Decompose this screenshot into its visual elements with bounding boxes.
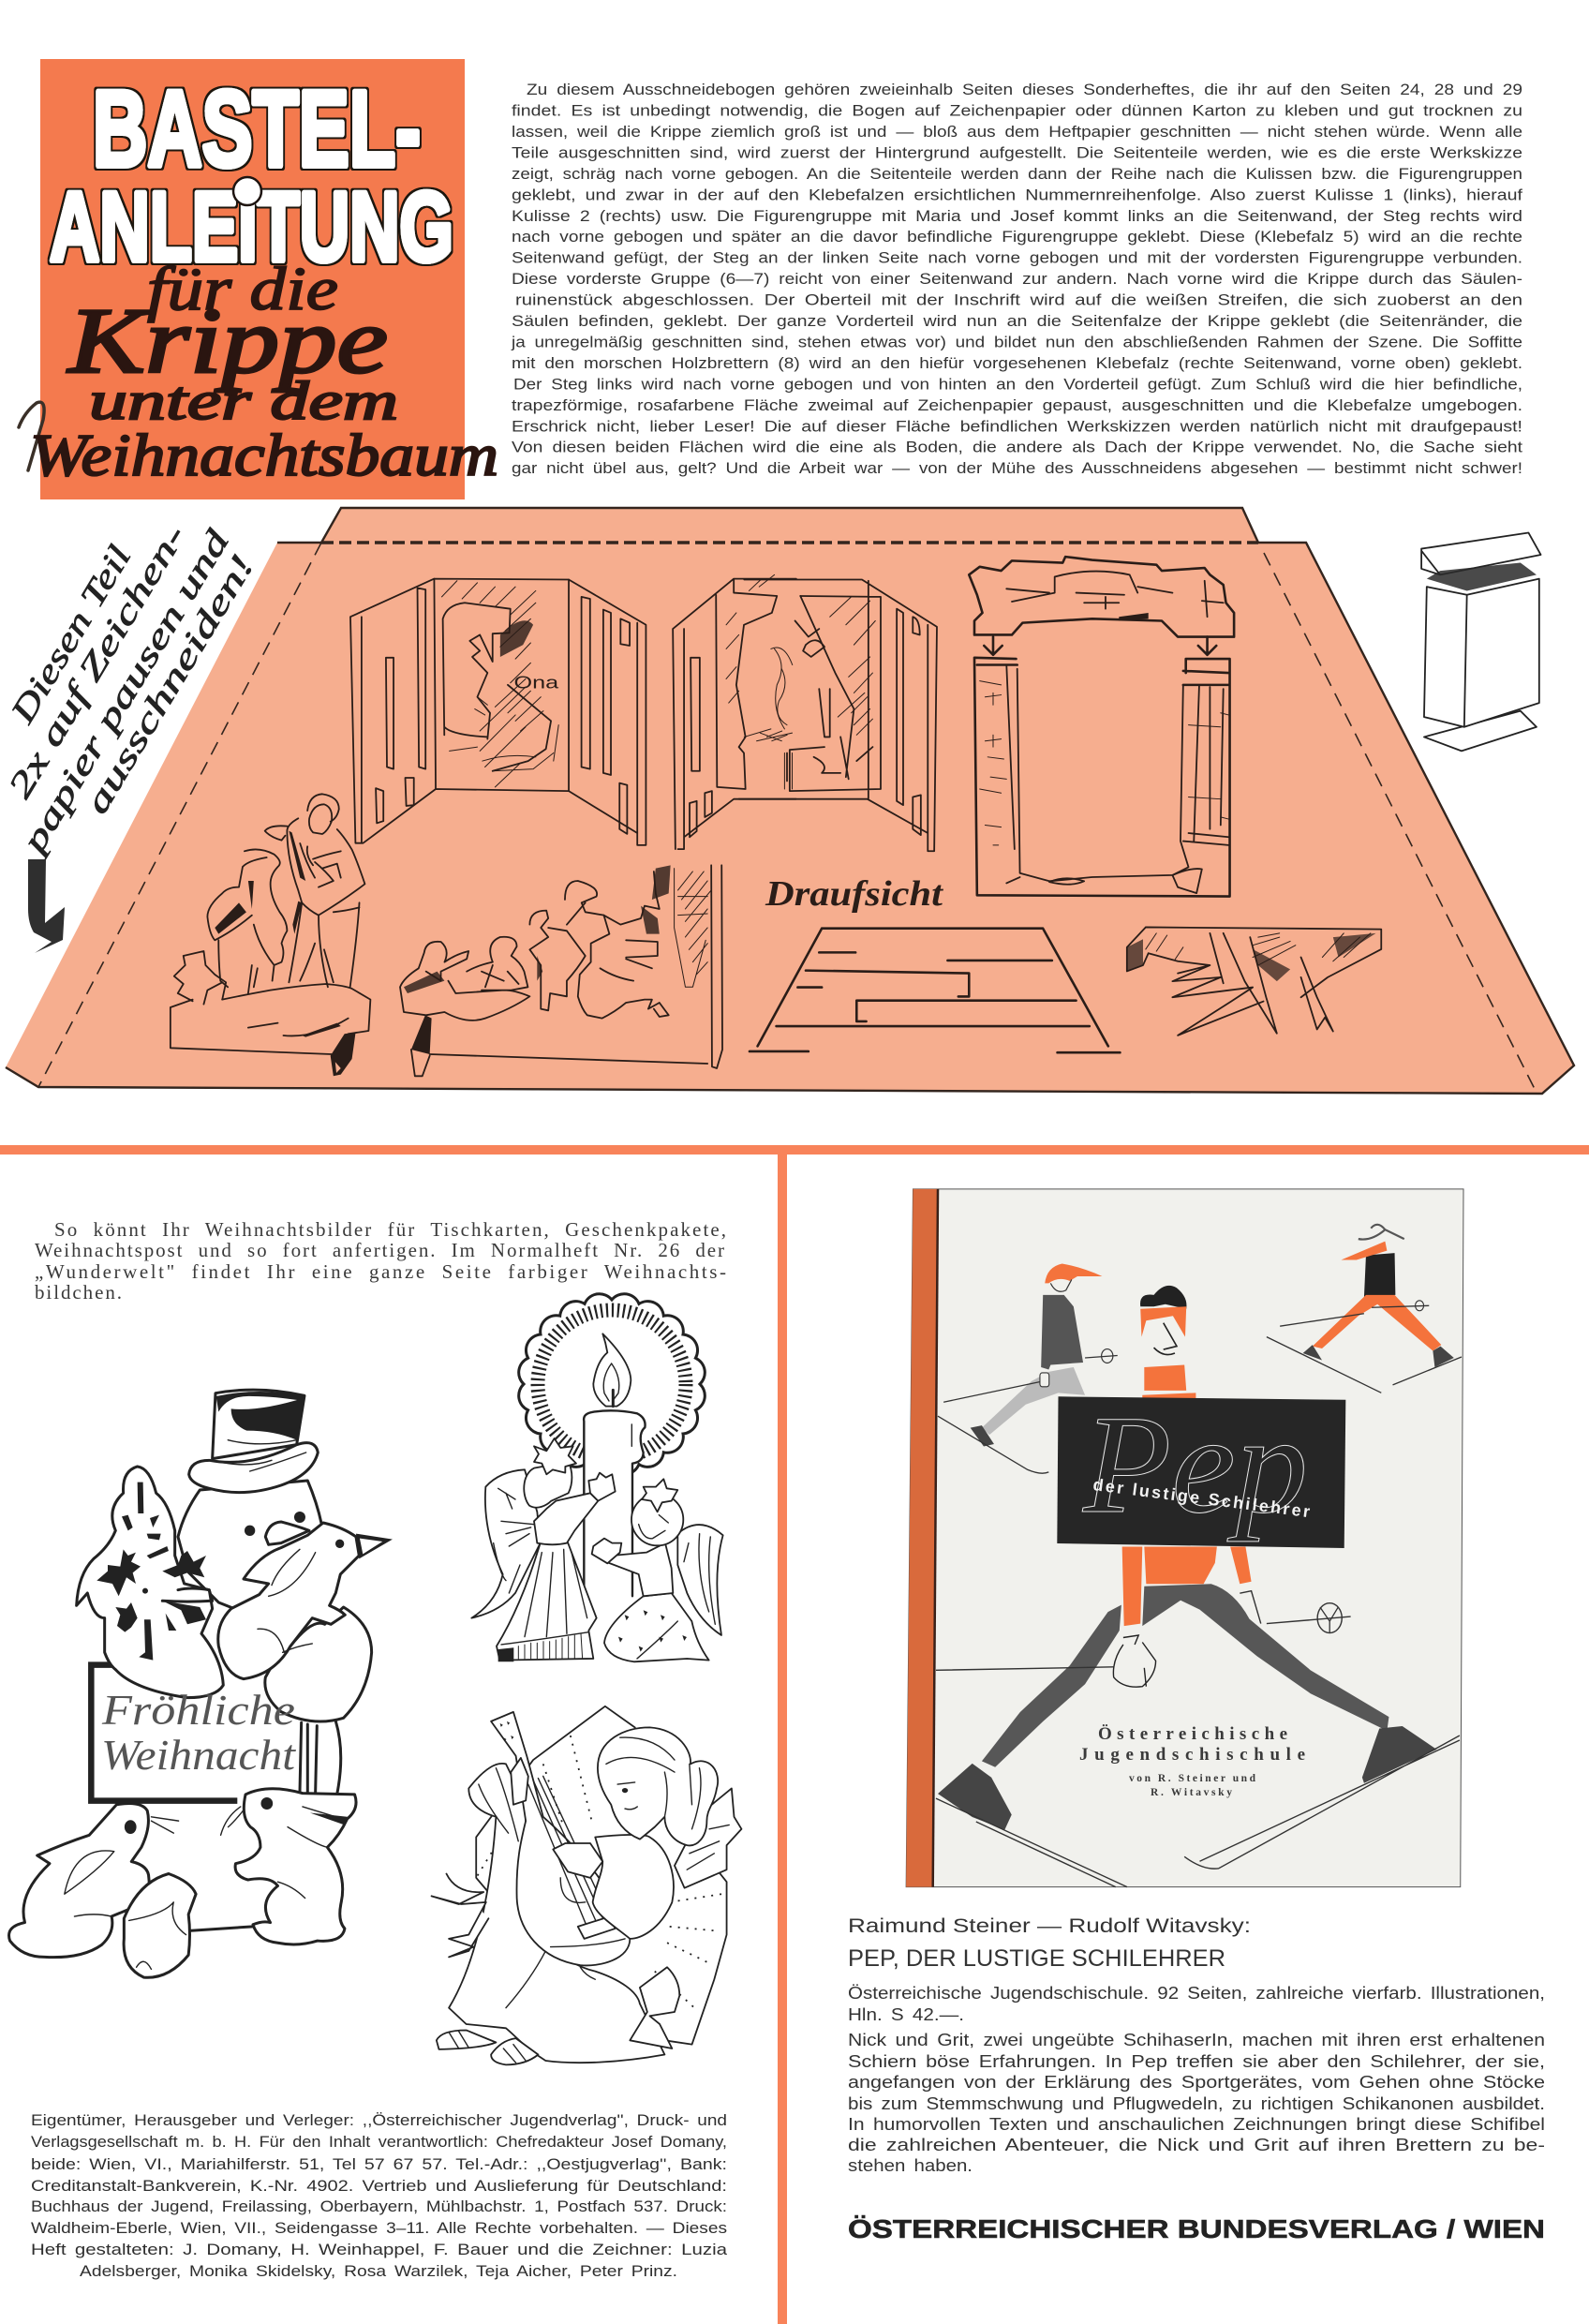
text block: instructions: trapezförmige, rosafarbene Fläche zweimal auf Zeichenpapier gepaust, ausgeschnitten und die Klebefalze umgebogen. bbox=[512, 397, 1522, 414]
left angel robe bbox=[497, 1540, 597, 1661]
right angel torso and arm bbox=[606, 1543, 673, 1596]
heading: Weihnachtsbaum: Weihnachtsbaum bbox=[30, 422, 498, 488]
text block: instructions: Kulisse 2 (rechts) usw. Die Figurengruppe mit Maria und Josef kommt links an die Seitenwand, der Steg rechts wird bbox=[512, 208, 1522, 225]
text block: book description: In humorvollen Texten und anschaulichen Zeichnungen bringt diese Schifibel bbox=[848, 2115, 1545, 2134]
text block: imprint: Buchhaus der Jugend, Freilassing, Oberbayern, Mühlbachstr. 1, Postfach 537. Druck: bbox=[31, 2198, 727, 2215]
kneeling figure bbox=[207, 849, 287, 993]
text block: instructions: Säulen befinden, geklebt. Der ganze Vorderteil wird nun an die Seitenfalze der Krippe geklebt (die Seitenränder, die bbox=[512, 313, 1522, 330]
heading: für die: für die bbox=[147, 255, 338, 323]
illustration: shepherds figure group bbox=[400, 865, 722, 1076]
illustration: left set piece (Kulisse 1) bbox=[350, 579, 646, 845]
illustration: snowman with rabbits and sign bbox=[9, 1390, 393, 1977]
right angel head and star bbox=[631, 1494, 683, 1545]
column frame bbox=[974, 658, 1230, 897]
divider: orange rule bbox=[0, 1145, 1589, 2324]
Pep teacher head bbox=[1140, 1286, 1186, 1309]
left skier bbox=[1045, 1264, 1102, 1283]
text block: instructions: Seitenwand gefügt, der Steg an der linken Seite nach vorne gebogen und mit der vordersten Figurengruppe verbunden. bbox=[512, 250, 1522, 267]
text block: instructions: ja unregelmäßig geschnitten sind, stehen etwas vor) und bildet nun den abschließenden Rahmen der Szene. Die Soffitte bbox=[511, 334, 1522, 350]
illustration: soffit with wooden boards bbox=[1127, 927, 1381, 1035]
nose and rabbit head bbox=[265, 1522, 309, 1544]
text block: instructions: Teile ausgeschnitten sind, wird zuerst der Hintergrund aufgestellt. Die Seitenteile werden, wie es die erste Werkskizze bbox=[512, 144, 1522, 161]
publisher line: ÖSTERREICHISCHER BUNDESVERLAG / WIEN bbox=[848, 2214, 1545, 2243]
icon: assembled white box bbox=[1421, 532, 1541, 751]
text block: imprint: beide: Wien, VI., Mariahilferstr. 51, Tel 57 67 57. Tel.-Adr.: ,,Oestjugverlag'', Bank: bbox=[31, 2156, 727, 2173]
illustration: right set piece (Kulisse 2) bbox=[673, 574, 937, 851]
greeting text: Fröhliche Weihnacht bbox=[101, 1686, 296, 1779]
cover imprint bbox=[1079, 1724, 1305, 1798]
label: Draufsicht: Draufsicht bbox=[765, 874, 944, 914]
text block: book description: die zahlreichen Abenteuer, die Nick und Grit auf ihren Brettern zu be- bbox=[848, 2136, 1545, 2154]
text block: instructions: zeigt, schräg nach vorne gebogen. An die Seitenteile werden dann der Reihe nach die Kulissen bzw. die Figurengruppen bbox=[512, 166, 1522, 183]
text: rotated handwritten note: ausschneiden! bbox=[78, 548, 261, 820]
fan background bbox=[476, 1706, 727, 2045]
right angel wing bbox=[677, 1525, 723, 1635]
illustration: portal with columns bbox=[969, 557, 1234, 897]
bush and base bbox=[174, 951, 226, 1005]
small inscription on the set piece: Ona bbox=[514, 673, 558, 693]
title plate lettering: der lustige Schilehrer bbox=[1092, 1475, 1311, 1521]
panel: peach trapezoid cut-out sheet bbox=[6, 508, 1574, 1094]
heading: ANLEITUNG: ANLEITUNG bbox=[50, 172, 453, 282]
text block: instructions: Erschrick nicht, lieber Leser! Die auf dieser Fläche befindlichen Werkskizzen werden natürlich nicht mit draufgepaust! bbox=[512, 418, 1522, 435]
Pep legs bbox=[1142, 1584, 1389, 1731]
text block: book authors and title: Raimund Steiner — Rudolf Witavsky: bbox=[848, 1915, 1251, 1937]
rabbit right bbox=[235, 1789, 356, 1944]
text block: instructions: lassen, weil die Krippe ziemlich groß ist und — bloß aus dem Heftpapier geschnitten — nicht stehen würde. Wenn alle bbox=[512, 124, 1522, 141]
text block: instructions: Diese vorderste Gruppe (6—7) reicht von einer Seitenwand zur andern. Nach vorne wird die Krippe durch das Säulen- bbox=[512, 271, 1522, 288]
text block: Weihnachtsbilder note: So könnt Ihr Weihnachtsbilder für Tischkarten, Geschenkpakete, bbox=[54, 1218, 726, 1241]
text: rotated handwritten note: 2x auf Zeichen- bbox=[1, 518, 193, 804]
illustration: angels with candle bbox=[471, 1294, 723, 1661]
text block: book description: Hln. S 42.—. bbox=[848, 2005, 964, 2024]
heading: Weihnachtsbaum bbox=[19, 402, 498, 488]
spine bbox=[906, 1189, 938, 1887]
snowman head bbox=[178, 1481, 321, 1628]
heading: Krippe: Krippe bbox=[67, 289, 388, 393]
left angel torso and arm bbox=[534, 1493, 598, 1544]
text block: book authors and title: PEP, DER LUSTIGE SCHILEHRER bbox=[848, 1945, 1225, 1972]
cover imprint: von R. Steiner und bbox=[1129, 1773, 1256, 1784]
top hat bbox=[213, 1390, 304, 1459]
title plate bbox=[1057, 1396, 1345, 1548]
sign bbox=[91, 1665, 237, 1801]
text block: imprint bbox=[31, 2112, 728, 2280]
panel: book cover bbox=[906, 1189, 1463, 1887]
text block: Weihnachtsbilder note bbox=[35, 1218, 726, 1304]
lute bbox=[491, 1712, 630, 1965]
text block: book description: Österreichische Jugendschischule. 92 Seiten, zahlreiche vierfarb. Illustrationen, bbox=[848, 1984, 1545, 2003]
left angel head and star bbox=[524, 1462, 572, 1508]
text block: imprint: Waldheim-Eberle, Wien, VII., Seidengasse 3–11. Alle Rechte vorbehalten. — Dieses bbox=[31, 2220, 727, 2237]
text block: book description: stehen haben. bbox=[848, 2156, 973, 2175]
text block: imprint: Heft gestalteten: J. Domany, H. Weinhappel, F. Bauer und die Zeichner: Luzia bbox=[31, 2242, 728, 2258]
text block: imprint: Creditanstalt-Bankverein, K.-Nr. 4902. Vertrieb und Auslieferung für Deutschland: bbox=[31, 2178, 727, 2195]
text block: instructions: Von diesen beiden Flächen wird die eine als Boden, die andere als Dach der Krippe verwendet. No, die Sache sieht bbox=[512, 439, 1522, 456]
sleeve and hands bbox=[593, 1835, 674, 1939]
cover imprint: Jugendschischule bbox=[1079, 1745, 1305, 1765]
candle halo bbox=[519, 1294, 705, 1474]
text: rotated handwritten note: papier pausen und bbox=[12, 522, 237, 862]
portal top piece bbox=[969, 557, 1234, 637]
right skier bbox=[1364, 1253, 1395, 1297]
illustration: Mary and Joseph figure group bbox=[171, 794, 370, 1076]
boots and skis bbox=[938, 1764, 1012, 1829]
text block: Weihnachtsbilder note: „Wunderwelt" findet Ihr eine ganze Seite farbiger Weihnachts- bbox=[35, 1260, 726, 1283]
cover imprint: Österreichische bbox=[1098, 1724, 1287, 1744]
heading: unter dem: unter dem bbox=[89, 370, 398, 431]
icon: curved down arrow bbox=[28, 859, 65, 953]
right angel dress bbox=[604, 1593, 709, 1661]
text block: instructions: Zu diesem Ausschneidebogen gehören zweieinhalb Seiten dieses Sonderheftes, die ihr auf den Seiten 24, 28 und 29 bbox=[527, 82, 1522, 98]
shoes bbox=[437, 2030, 538, 2064]
upper rabbit body bbox=[218, 1523, 359, 1679]
ribbons and robe bbox=[449, 1764, 664, 2063]
text block: Weihnachtsbilder note: Weihnachtspost und so fort anfertigen. Im Normalheft Nr. 26 der bbox=[35, 1239, 724, 1261]
heading: BASTEL-: BASTEL- bbox=[93, 69, 421, 189]
wing bbox=[675, 1788, 741, 1888]
assembly arrows bbox=[984, 637, 1216, 655]
Pep body and arms bbox=[1144, 1546, 1217, 1584]
text block: instructions: ruinenstück abgeschlossen. Der Oberteil mit der Inschrift wird auf die weißen Streifen, die sich zuoberst an den bbox=[515, 292, 1522, 309]
text block: instructions: findet. Es ist unbedingt notwendig, die Bogen auf Zeichenpapier oder dünnen Karton zu kleben und gut trocknen zu bbox=[512, 103, 1522, 120]
text block: instructions bbox=[511, 82, 1522, 477]
text block: imprint: Adelsberger, Monika Skidelsky, Rosa Warzilek, Teja Aicher, Peter Prinz. bbox=[80, 2263, 677, 2280]
flame bbox=[593, 1333, 631, 1407]
text: rotated handwritten note bbox=[1, 518, 261, 862]
left angel wing bbox=[471, 1469, 541, 1618]
rabbit left bbox=[9, 1804, 149, 1958]
text block: instructions: mit den morschen Holzbrettern (8) wird an den hiefür vorgesehenen Klebefalz (rechte Seitenwand, vorne oben) geklebt. bbox=[512, 355, 1522, 372]
candle body bbox=[584, 1410, 646, 1596]
text block: instructions: nach vorne gebogen und später an die davor befindliche Figurengruppe geklebt. Diese (Klebefalz 5) wird an die rechte bbox=[512, 229, 1522, 246]
panel: title block bbox=[19, 59, 498, 499]
text block: book description: Schiern böse Erfahrungen. In Pep treffen sie aber den Schilehrer, der sie, bbox=[848, 2052, 1545, 2071]
title plate lettering: Pep bbox=[1082, 1387, 1308, 1542]
rabbit small bbox=[124, 1874, 196, 1977]
greeting text: Fröhliche Weihnacht: Fröhliche bbox=[101, 1686, 295, 1734]
text block: book authors and title bbox=[848, 1915, 1251, 1972]
text block: imprint: Eigentümer, Herausgeber und Verleger: ,,Österreichischer Jugendverlag'', Druck- und bbox=[31, 2112, 727, 2129]
greeting text: Fröhliche Weihnacht: Weihnacht bbox=[101, 1731, 296, 1779]
text block: instructions: Der Steg links wird nach vorne gebogen und von hinten an den Vorderteil gefügt. Zum Schluß wird die hier befindliche, bbox=[513, 376, 1522, 393]
text block: instructions: gar nicht übel aus, gelt? Und die Arbeit war — von der Mühe des Ausschneidens abgesehen — bestimmt nicht schwer! bbox=[512, 460, 1522, 477]
text: rotated handwritten note: Diesen Teil bbox=[3, 539, 139, 730]
text block: Weihnachtsbilder note: bildchen. bbox=[35, 1281, 122, 1304]
text block: book description bbox=[848, 1984, 1545, 2175]
illustration: angel playing lute bbox=[432, 1706, 741, 2064]
text block: book description: Nick und Grit, zwei ungeübte SchihaserIn, machen mit ihren erst erhaltenen bbox=[848, 2031, 1545, 2049]
cover imprint: R. Witavsky bbox=[1151, 1787, 1232, 1798]
diagram: floor plan bbox=[750, 929, 1120, 1052]
tree bbox=[77, 1467, 223, 1698]
lower body and legs bbox=[265, 1607, 372, 1721]
text block: book description: bis zum Stemmschwung und Pflugwedeln, zu richtigen Schikanonen ausbildet. bbox=[848, 2094, 1545, 2113]
hands and poles bbox=[1113, 1635, 1156, 1687]
head and hair bbox=[598, 1727, 718, 1845]
text block: imprint: Verlagsgesellschaft m. b. H. Für den Inhalt verantwortlich: Chefredakteur Josef Domany, bbox=[31, 2134, 727, 2151]
text block: book description: angefangen von der Erklärung des Sportgerätes, vom Gehen ohne Stöcke bbox=[848, 2073, 1545, 2092]
text block: instructions: geklebt, und zwar in der auf den Klebefalzen ersichtlichen Nummernreihenfolge. Also zuerst Kulisse 1 (links), hierauf bbox=[512, 186, 1522, 203]
